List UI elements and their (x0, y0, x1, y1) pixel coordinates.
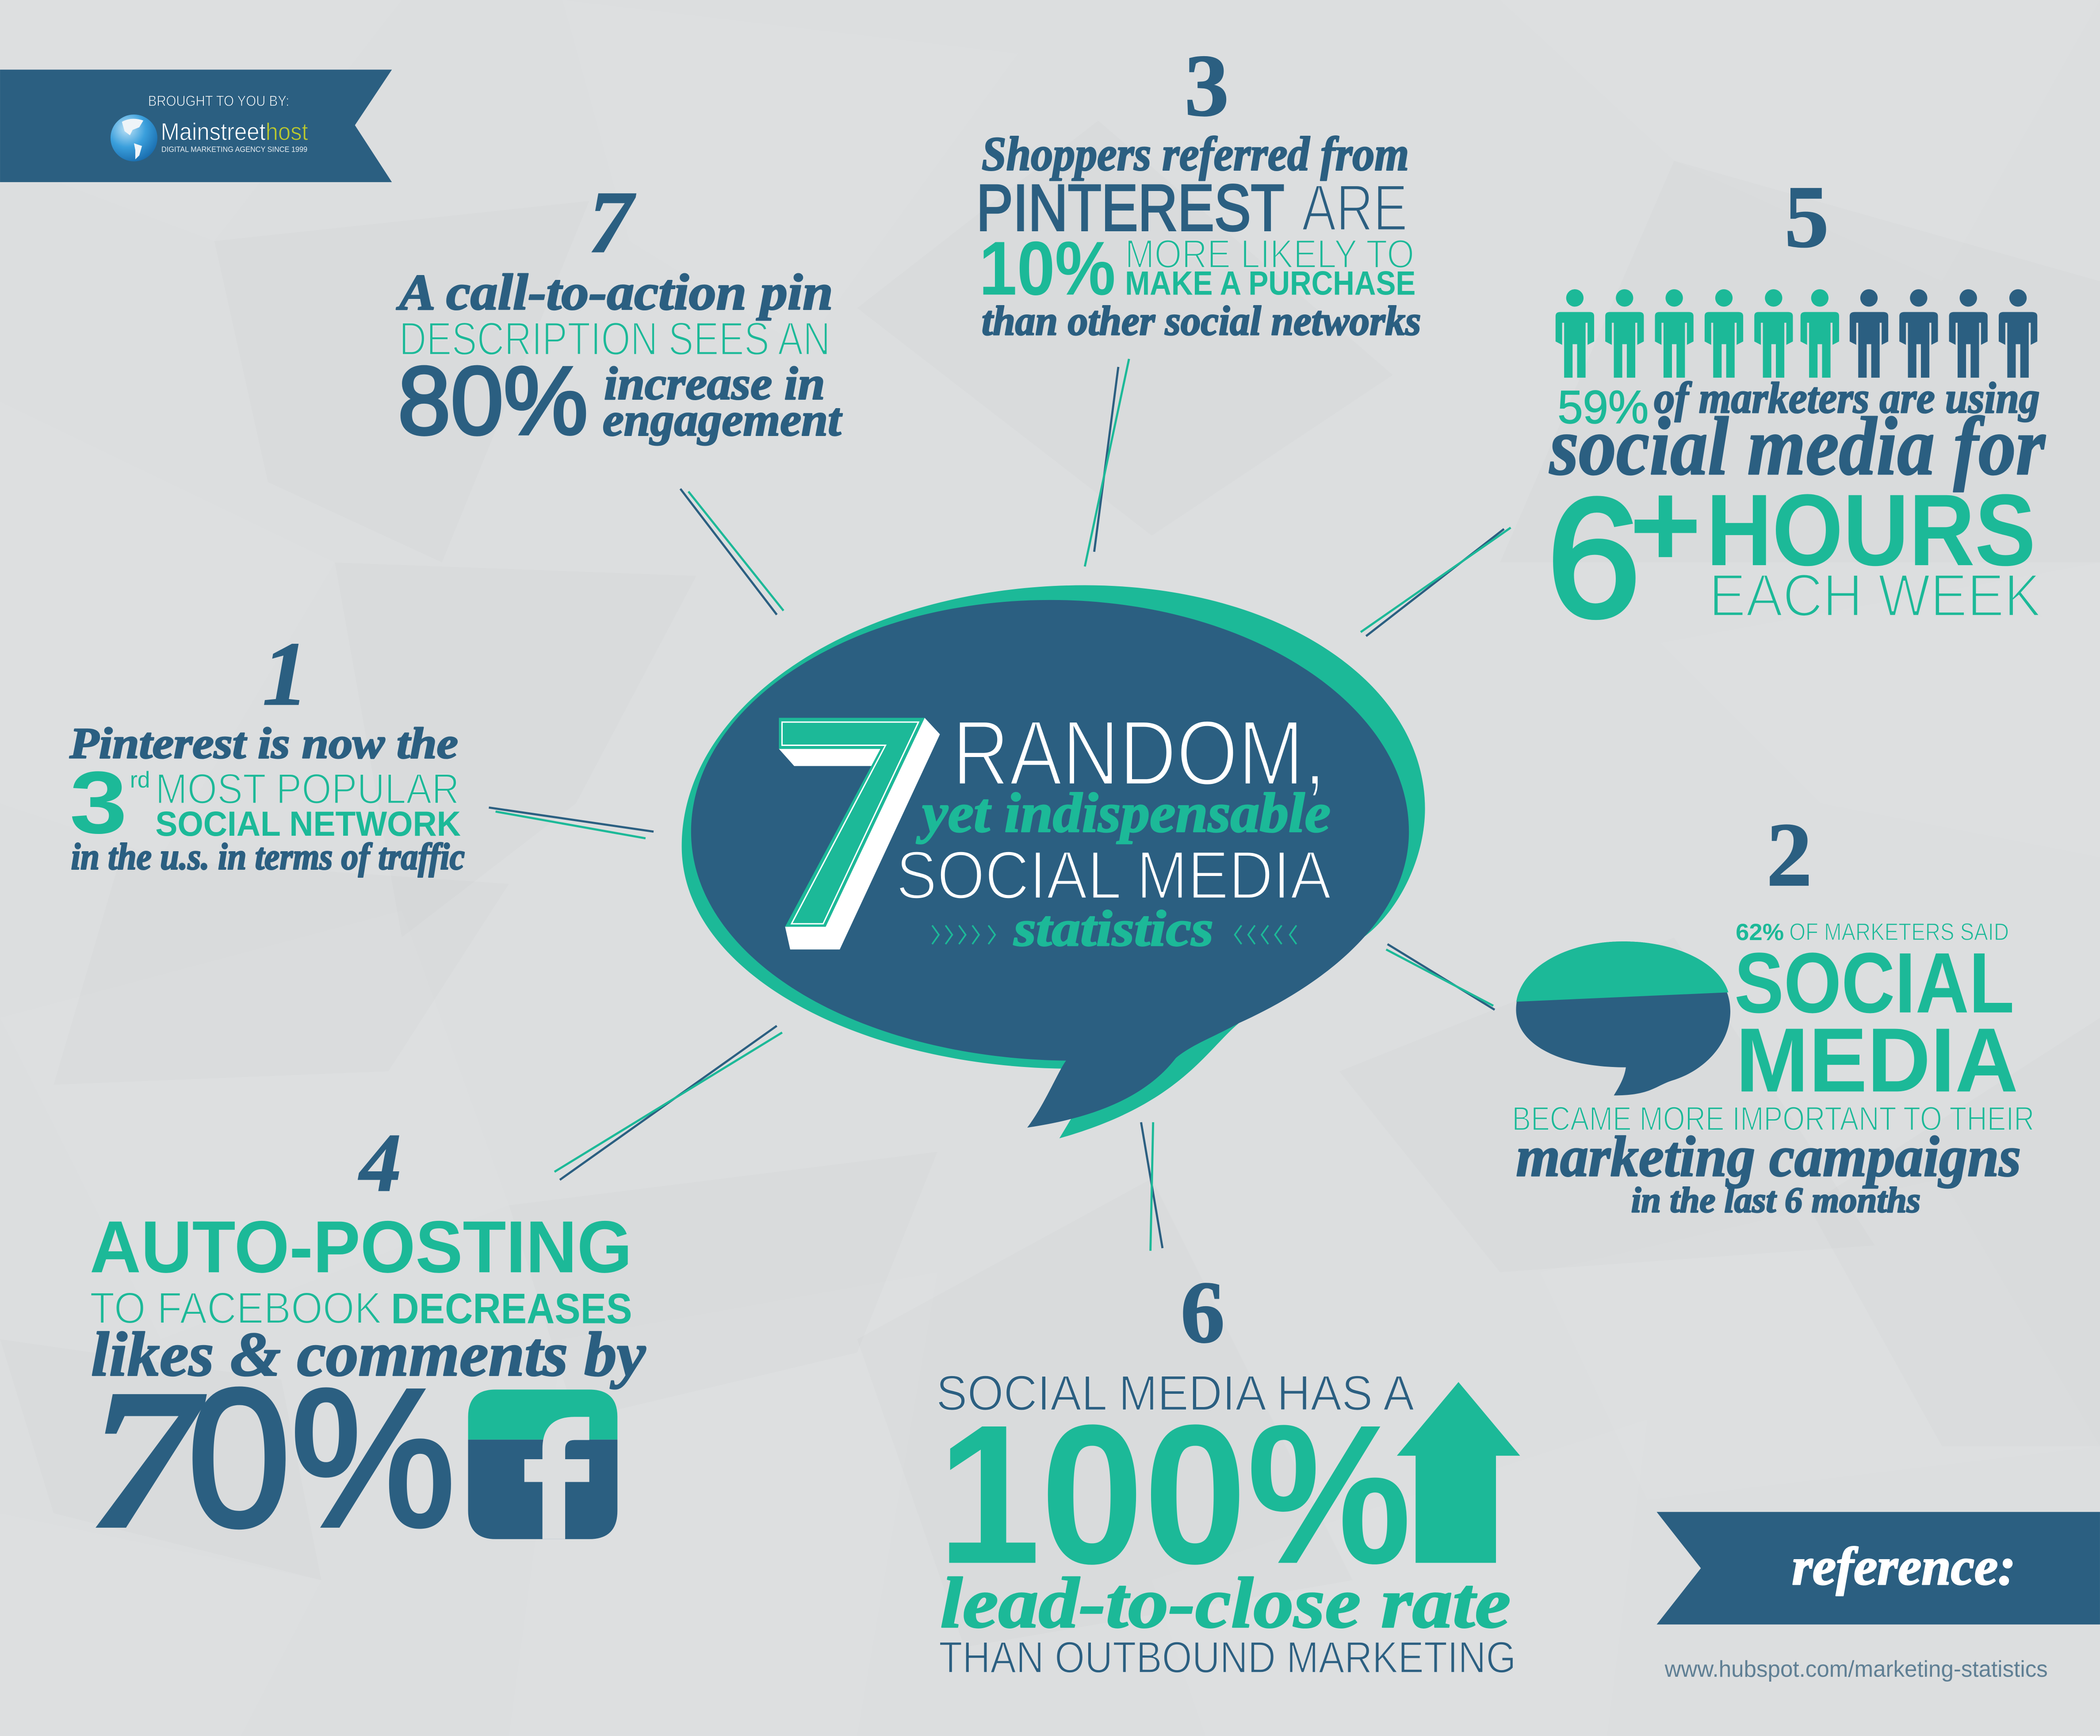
connector line: fact 6 (1141, 1122, 1163, 1251)
connector line: fact 1 (489, 807, 654, 838)
of marketers said: OF MARKETERS SAID (1789, 918, 2009, 945)
seventy percent: 0% (187, 1349, 455, 1567)
pinterest: PINTEREST (976, 172, 1285, 245)
banner: brought to you by (0, 69, 392, 182)
likes and comments by: likes & comments by (91, 1319, 646, 1389)
make a purchase: MAKE A PURCHASE (1125, 264, 1415, 302)
logo: globe (111, 115, 157, 161)
script line 2: in the u.s. in terms of traffic (71, 836, 465, 878)
hours: HOURS (1706, 473, 2036, 587)
number 5: 5 (1785, 168, 1829, 266)
increase in: increase in (604, 358, 825, 409)
title: random: RANDOM, (952, 702, 1326, 805)
title: yet indispensable: yet indispensable (916, 782, 1331, 844)
fact 4: auto posting (88, 1117, 646, 1571)
chevrons left (1235, 925, 1297, 944)
logo: tagline: DIGITAL MARKETING AGENCY SINCE 1999 (161, 145, 307, 154)
title: statistics: statistics (1014, 900, 1213, 956)
banner caption: BROUGHT TO YOU BY: (148, 93, 289, 109)
number 1: 1 (263, 623, 308, 724)
connector line: fact 5 (1361, 528, 1511, 636)
number 7: 7 (589, 173, 636, 271)
seventy percent (88, 1348, 455, 1571)
number 2: 2 (1767, 804, 1812, 905)
of marketers are using: of marketers are using (1654, 373, 2040, 422)
script line: Shoppers referred from (982, 127, 1409, 181)
number 6: 6 (1181, 1264, 1225, 1361)
banner: reference (1656, 1512, 2100, 1625)
bubble: teal shadow (682, 585, 1425, 1138)
plus (1634, 496, 1696, 557)
fact 7: call to action (396, 173, 843, 455)
reference label: reference: (1792, 1537, 2016, 1596)
social: SOCIAL (1734, 936, 2014, 1031)
social media has a: SOCIAL MEDIA HAS A (936, 1365, 1415, 1421)
chevrons right (932, 925, 995, 944)
media: MEDIA (1736, 1009, 2018, 1111)
connector line: fact 7 (681, 489, 784, 615)
most popular: MOST POPULAR (155, 765, 459, 813)
number 3: 3 (1185, 37, 1229, 134)
rd: rd (130, 767, 150, 792)
reference url: www.hubspot.com/marketing-statistics (1664, 1656, 2048, 1682)
one hundred percent: 100% (937, 1383, 1411, 1605)
script line: Pinterest is now the (69, 719, 458, 768)
split speech bubble icon (1516, 941, 1730, 1095)
each week: EACH WEEK (1709, 562, 2041, 629)
logo: company name: Mainstreethost (161, 118, 308, 145)
fact 1: third most popular (69, 623, 465, 878)
are: ARE (1302, 172, 1408, 245)
more likely to: MORE LIKELY TO (1125, 232, 1414, 277)
eighty percent: 80% (398, 347, 588, 455)
marketing campaigns: marketing campaigns (1516, 1125, 2021, 1189)
central speech bubble title (682, 585, 1425, 1138)
bubble: blue body (691, 600, 1409, 1128)
in the last six months: in the last 6 months (1631, 1180, 1920, 1220)
engagement: engagement (603, 394, 843, 445)
three: 3 (70, 753, 127, 852)
fact 3: pinterest shoppers (976, 37, 1421, 344)
decreases: DECREASES (391, 1284, 632, 1332)
connector line: fact 2 (1386, 944, 1495, 1010)
to facebook: TO FACEBOOK (90, 1284, 382, 1333)
connector line: fact 3 (1085, 359, 1129, 566)
script line: A call-to-action pin (396, 264, 833, 321)
sixty two percent: 62% (1736, 919, 1784, 945)
fact 2: social media importance (1512, 804, 2035, 1220)
icon: up arrow (1397, 1382, 1520, 1563)
fifty nine percent: 59% (1557, 381, 1649, 433)
description sees an: DESCRIPTION SEES AN (399, 313, 830, 365)
social network: SOCIAL NETWORK (155, 804, 461, 843)
connector line: fact 4 (555, 1026, 782, 1180)
ten percent: 10% (979, 226, 1116, 311)
big numeral seven (779, 718, 940, 949)
seventy percent: 7 (88, 1348, 209, 1571)
script line 2: than other social networks (982, 298, 1421, 344)
icon: facebook (468, 1389, 617, 1539)
than outbound marketing: THAN OUTBOUND MARKETING (939, 1633, 1516, 1682)
number 4: 4 (358, 1117, 401, 1208)
lead-to-close rate: lead-to-close rate (940, 1563, 1511, 1643)
auto-posting: AUTO-POSTING (90, 1206, 632, 1288)
people icons (1556, 289, 2037, 378)
fact 6: lead to close rate (936, 1264, 1520, 1682)
six: 6 (1547, 463, 1641, 652)
title: social media: SOCIAL MEDIA (896, 837, 1331, 913)
fact 5: marketers hours (1547, 168, 2046, 652)
social media for: social media for (1549, 400, 2046, 492)
